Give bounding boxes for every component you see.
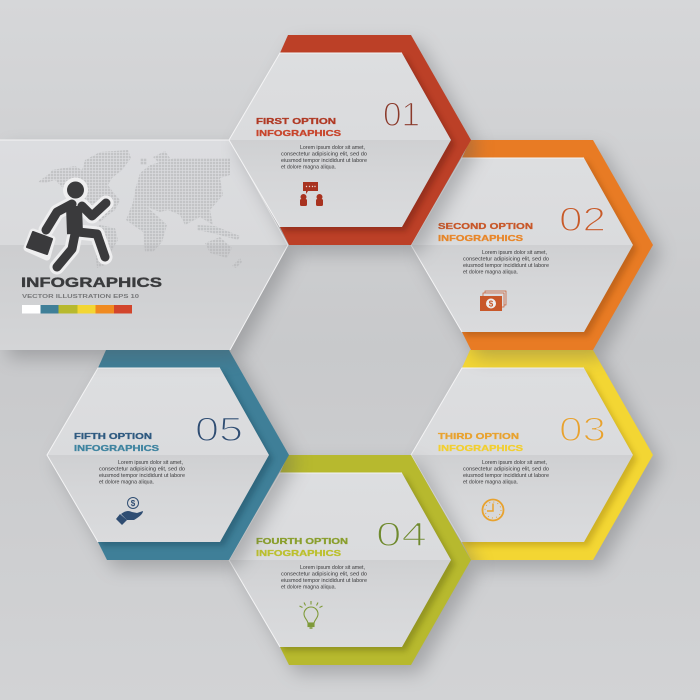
- panel: first option: Lorem ipsum dolor sit amet,: [300, 145, 365, 151]
- icon: two people talking: [300, 182, 323, 206]
- panel: fourth option: [229, 455, 479, 673]
- panel: fourth option: et dolore magna aliqua.: [281, 584, 336, 590]
- icon: banknotes: $: [489, 300, 494, 308]
- panel: second option: consectetur adipisicing elit, sed do: [463, 256, 549, 262]
- panel: first option: [229, 35, 479, 253]
- heading: infographics: INFOGRAPHICS: [21, 275, 162, 290]
- subheading: VECTOR ILLUSTRATION EPS 10: [22, 294, 139, 300]
- panel: third option: et dolore magna aliqua.: [463, 480, 518, 486]
- panel: fourth option: consectetur adipisicing elit, sed do: [281, 572, 367, 578]
- panel: first option: 01: [383, 96, 420, 134]
- panel: first option: eiusmod tempor incididunt ut labore: [281, 158, 367, 164]
- panel: fourth option: eiusmod tempor incididunt ut labore: [281, 578, 367, 584]
- icon: running businessman: [27, 178, 106, 267]
- icon: light bulb: [300, 601, 322, 628]
- panel: second option: Lorem ipsum dolor sit amet,: [482, 250, 547, 256]
- panel: second option: 02: [559, 201, 606, 239]
- panel: fourth option: Lorem ipsum dolor sit amet,: [300, 565, 365, 571]
- panel: fourth option: INFOGRAPHICS: [256, 548, 341, 558]
- panel: second option: INFOGRAPHICS: [438, 233, 523, 243]
- panel: first option: INFOGRAPHICS: [256, 128, 341, 138]
- legend: colour bar: [22, 305, 132, 314]
- panel: first option: FIRST OPTION: [256, 116, 336, 126]
- panel: third option: [411, 350, 661, 568]
- panel: second option: [411, 140, 661, 358]
- chart: dotted world map: [38, 150, 242, 268]
- panel: third option: 03: [559, 411, 606, 449]
- panel: fifth option: Lorem ipsum dolor sit amet,: [118, 460, 183, 466]
- icon: clock: [482, 500, 504, 520]
- panel: third option: consectetur adipisicing elit, sed do: [463, 466, 549, 472]
- panel: third option: INFOGRAPHICS: [438, 443, 523, 453]
- panel: fourth option: FOURTH OPTION: [256, 536, 348, 546]
- panel: third option: Lorem ipsum dolor sit amet,: [482, 460, 547, 466]
- panel: fifth option: consectetur adipisicing elit, sed do: [99, 466, 185, 472]
- panel: second option: et dolore magna aliqua.: [463, 270, 518, 276]
- panel: fourth option: 04: [376, 516, 427, 554]
- icon: hand holding coin: [116, 498, 143, 525]
- panel: fifth option: et dolore magna aliqua.: [99, 480, 154, 486]
- panel: first option: consectetur adipisicing elit, sed do: [281, 152, 367, 158]
- panel: third option: THIRD OPTION: [438, 431, 519, 441]
- icon: hand holding coin: $: [131, 499, 136, 508]
- panel: fifth option: 05: [195, 411, 243, 449]
- panel: second option: eiusmod tempor incididunt ut labore: [463, 263, 549, 269]
- panel: fifth option: FIFTH OPTION: [74, 431, 152, 441]
- panel: first option: et dolore magna aliqua.: [281, 164, 336, 170]
- panel: second option: SECOND OPTION: [438, 221, 533, 231]
- panel: third option: eiusmod tempor incididunt ut labore: [463, 473, 549, 479]
- icon: banknotes: [480, 291, 506, 311]
- panel: intro with world map: [0, 140, 296, 358]
- panel: fifth option: INFOGRAPHICS: [74, 443, 159, 453]
- panel: fifth option: [47, 350, 297, 568]
- panel: fifth option: eiusmod tempor incididunt ut labore: [99, 473, 185, 479]
